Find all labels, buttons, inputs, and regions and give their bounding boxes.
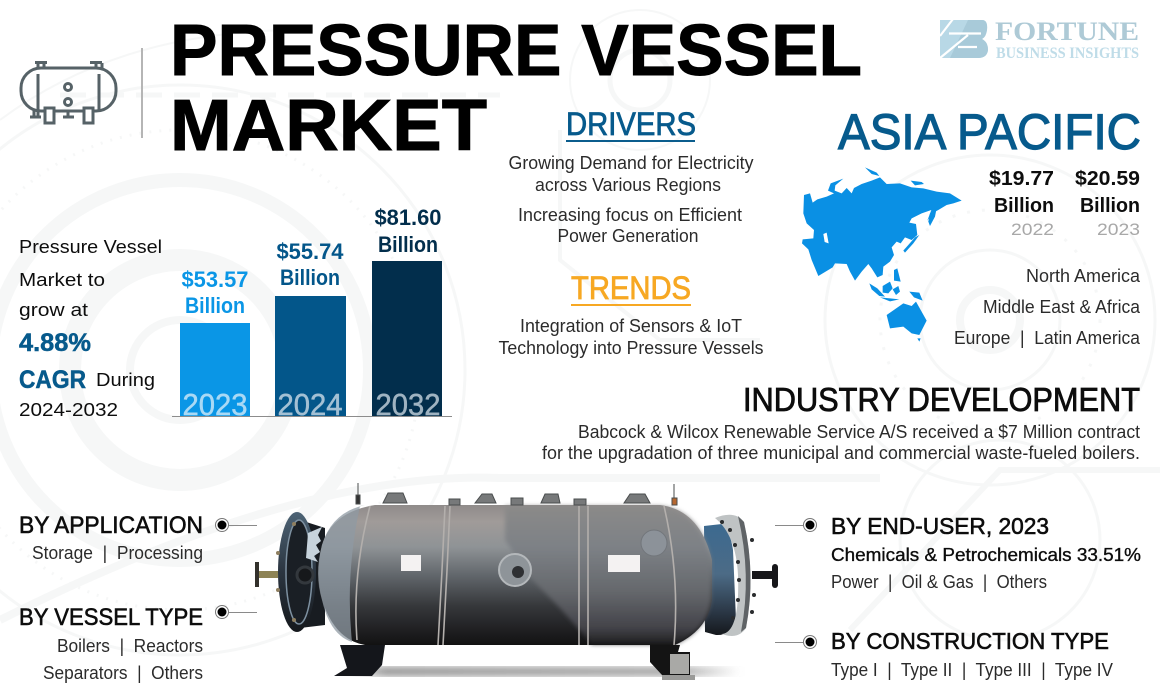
growth text: grow at: [19, 299, 88, 320]
bar 2023: $53.57: [182, 267, 248, 292]
callout: by end-user: Chemicals & Petrochemicals 33.51%: [831, 545, 1141, 565]
trends text: [498, 316, 764, 358]
drivers text: across Various Regions: [535, 175, 721, 195]
industry development heading: INDUSTRY DEVELOPMENT: [743, 381, 1140, 418]
floor shadow: [345, 667, 740, 676]
callout: by end-user: BY END-USER, 2023: [831, 513, 1049, 539]
bar 2023: Billion: [185, 293, 245, 318]
bar 2023: 2023: [182, 387, 248, 422]
bar 2032: Billion: [378, 232, 438, 257]
title: MARKET: [170, 86, 487, 166]
bar 2024: [275, 239, 346, 422]
callout: by construction type: BY CONSTRUCTION TYPE: [831, 628, 1109, 654]
right flange: [704, 515, 756, 636]
left flange: [276, 512, 325, 632]
nozzle: [499, 554, 531, 586]
growth text: 2024-2032: [19, 399, 118, 420]
growth text: Pressure Vessel: [19, 236, 162, 257]
connector dot: [216, 518, 257, 532]
map: Asia Pacific: [802, 167, 962, 342]
growth text: During: [96, 369, 155, 390]
industry development text: Babcock & Wilcox Renewable Service A/S received a $7 Million contract: [578, 422, 1140, 442]
callout: by construction type: [775, 628, 1113, 680]
connector dot: [775, 636, 816, 648]
bar 2024: Billion: [280, 265, 340, 290]
region heading: ASIA PACIFIC: [838, 104, 1141, 160]
bar chart: [172, 205, 452, 422]
title: PRESSURE VESSEL: [170, 11, 862, 91]
right valve: [752, 564, 778, 588]
callout: by construction type: Type I | Type II | Type III | Type IV: [831, 660, 1113, 680]
trends text: Technology into Pressure Vessels: [498, 338, 764, 358]
bar 2023: [180, 267, 250, 422]
drivers text: Power Generation: [558, 226, 698, 246]
callout: by end-user: Power | Oil & Gas | Others: [831, 572, 1047, 592]
logo: Fortune Business Insights: [940, 17, 1139, 62]
trends text: Integration of Sensors & IoT: [520, 316, 742, 336]
other regions: [954, 266, 1141, 348]
other regions: North America: [1026, 266, 1141, 286]
right half lighter shading: [505, 506, 711, 644]
industry development text: for the upgradation of three municipal and commercial waste-fueled boilers.: [542, 443, 1140, 463]
region years: 2022: [1011, 220, 1054, 239]
growth text: CAGR: [19, 366, 86, 394]
bar 2024: $55.74: [276, 239, 344, 264]
saddle supports: [334, 645, 695, 680]
region years: [1011, 220, 1140, 239]
bar 2032: [372, 205, 442, 422]
logo: Fortune Business Insights: BUSINESS INSIGHTS: [996, 45, 1139, 62]
shell seams: [356, 506, 676, 645]
manway: [641, 530, 667, 556]
callout: by vessel type: BY VESSEL TYPE: [19, 604, 203, 631]
growth text: [19, 236, 162, 420]
logo: Fortune Business Insights: FORTUNE: [995, 17, 1139, 46]
bar 2032: 2032: [376, 387, 440, 422]
top fittings: [356, 483, 677, 505]
region years: 2023: [1097, 220, 1140, 239]
callout: by vessel type: [19, 604, 257, 683]
callout: by vessel type: Boilers | Reactors: [57, 636, 203, 656]
bar 2032: $81.60: [374, 205, 442, 230]
bar 2024: 2024: [278, 387, 342, 422]
growth text: Market to: [19, 269, 105, 290]
callout: by application: Storage | Processing: [32, 543, 203, 563]
left valve: [255, 562, 278, 587]
growth text: 4.88%: [19, 329, 91, 357]
logo monogram: [940, 19, 988, 58]
drivers text: Increasing focus on Efficient: [518, 205, 742, 225]
region values: $20.59: [1075, 168, 1140, 190]
callout: by vessel type: Separators | Others: [43, 663, 203, 683]
region values: [989, 168, 1140, 217]
vessel shell: [318, 505, 712, 645]
trends heading: TRENDS: [571, 270, 691, 306]
title: [170, 11, 862, 166]
drivers text: Growing Demand for Electricity: [508, 153, 754, 173]
illustration: pressure vessel: [255, 483, 778, 680]
callout: by application: BY APPLICATION: [19, 512, 203, 539]
industry development text: [542, 422, 1140, 463]
other regions: Europe | Latin America: [954, 328, 1141, 348]
region values: $19.77: [989, 168, 1054, 190]
left dome highlight: [318, 505, 365, 642]
connector dot: [216, 606, 257, 618]
drivers text: [508, 153, 754, 246]
other regions: Middle East & Africa: [983, 297, 1141, 317]
icon: pressure vessel: [21, 62, 116, 123]
drivers heading: DRIVERS: [566, 106, 696, 142]
callout: by application: [19, 512, 257, 563]
connector dot: [775, 518, 816, 532]
region values: Billion: [1080, 195, 1140, 217]
region values: Billion: [994, 195, 1054, 217]
divider: [141, 48, 143, 138]
callout: by end-user: [775, 513, 1141, 592]
nameplates: [401, 555, 640, 572]
